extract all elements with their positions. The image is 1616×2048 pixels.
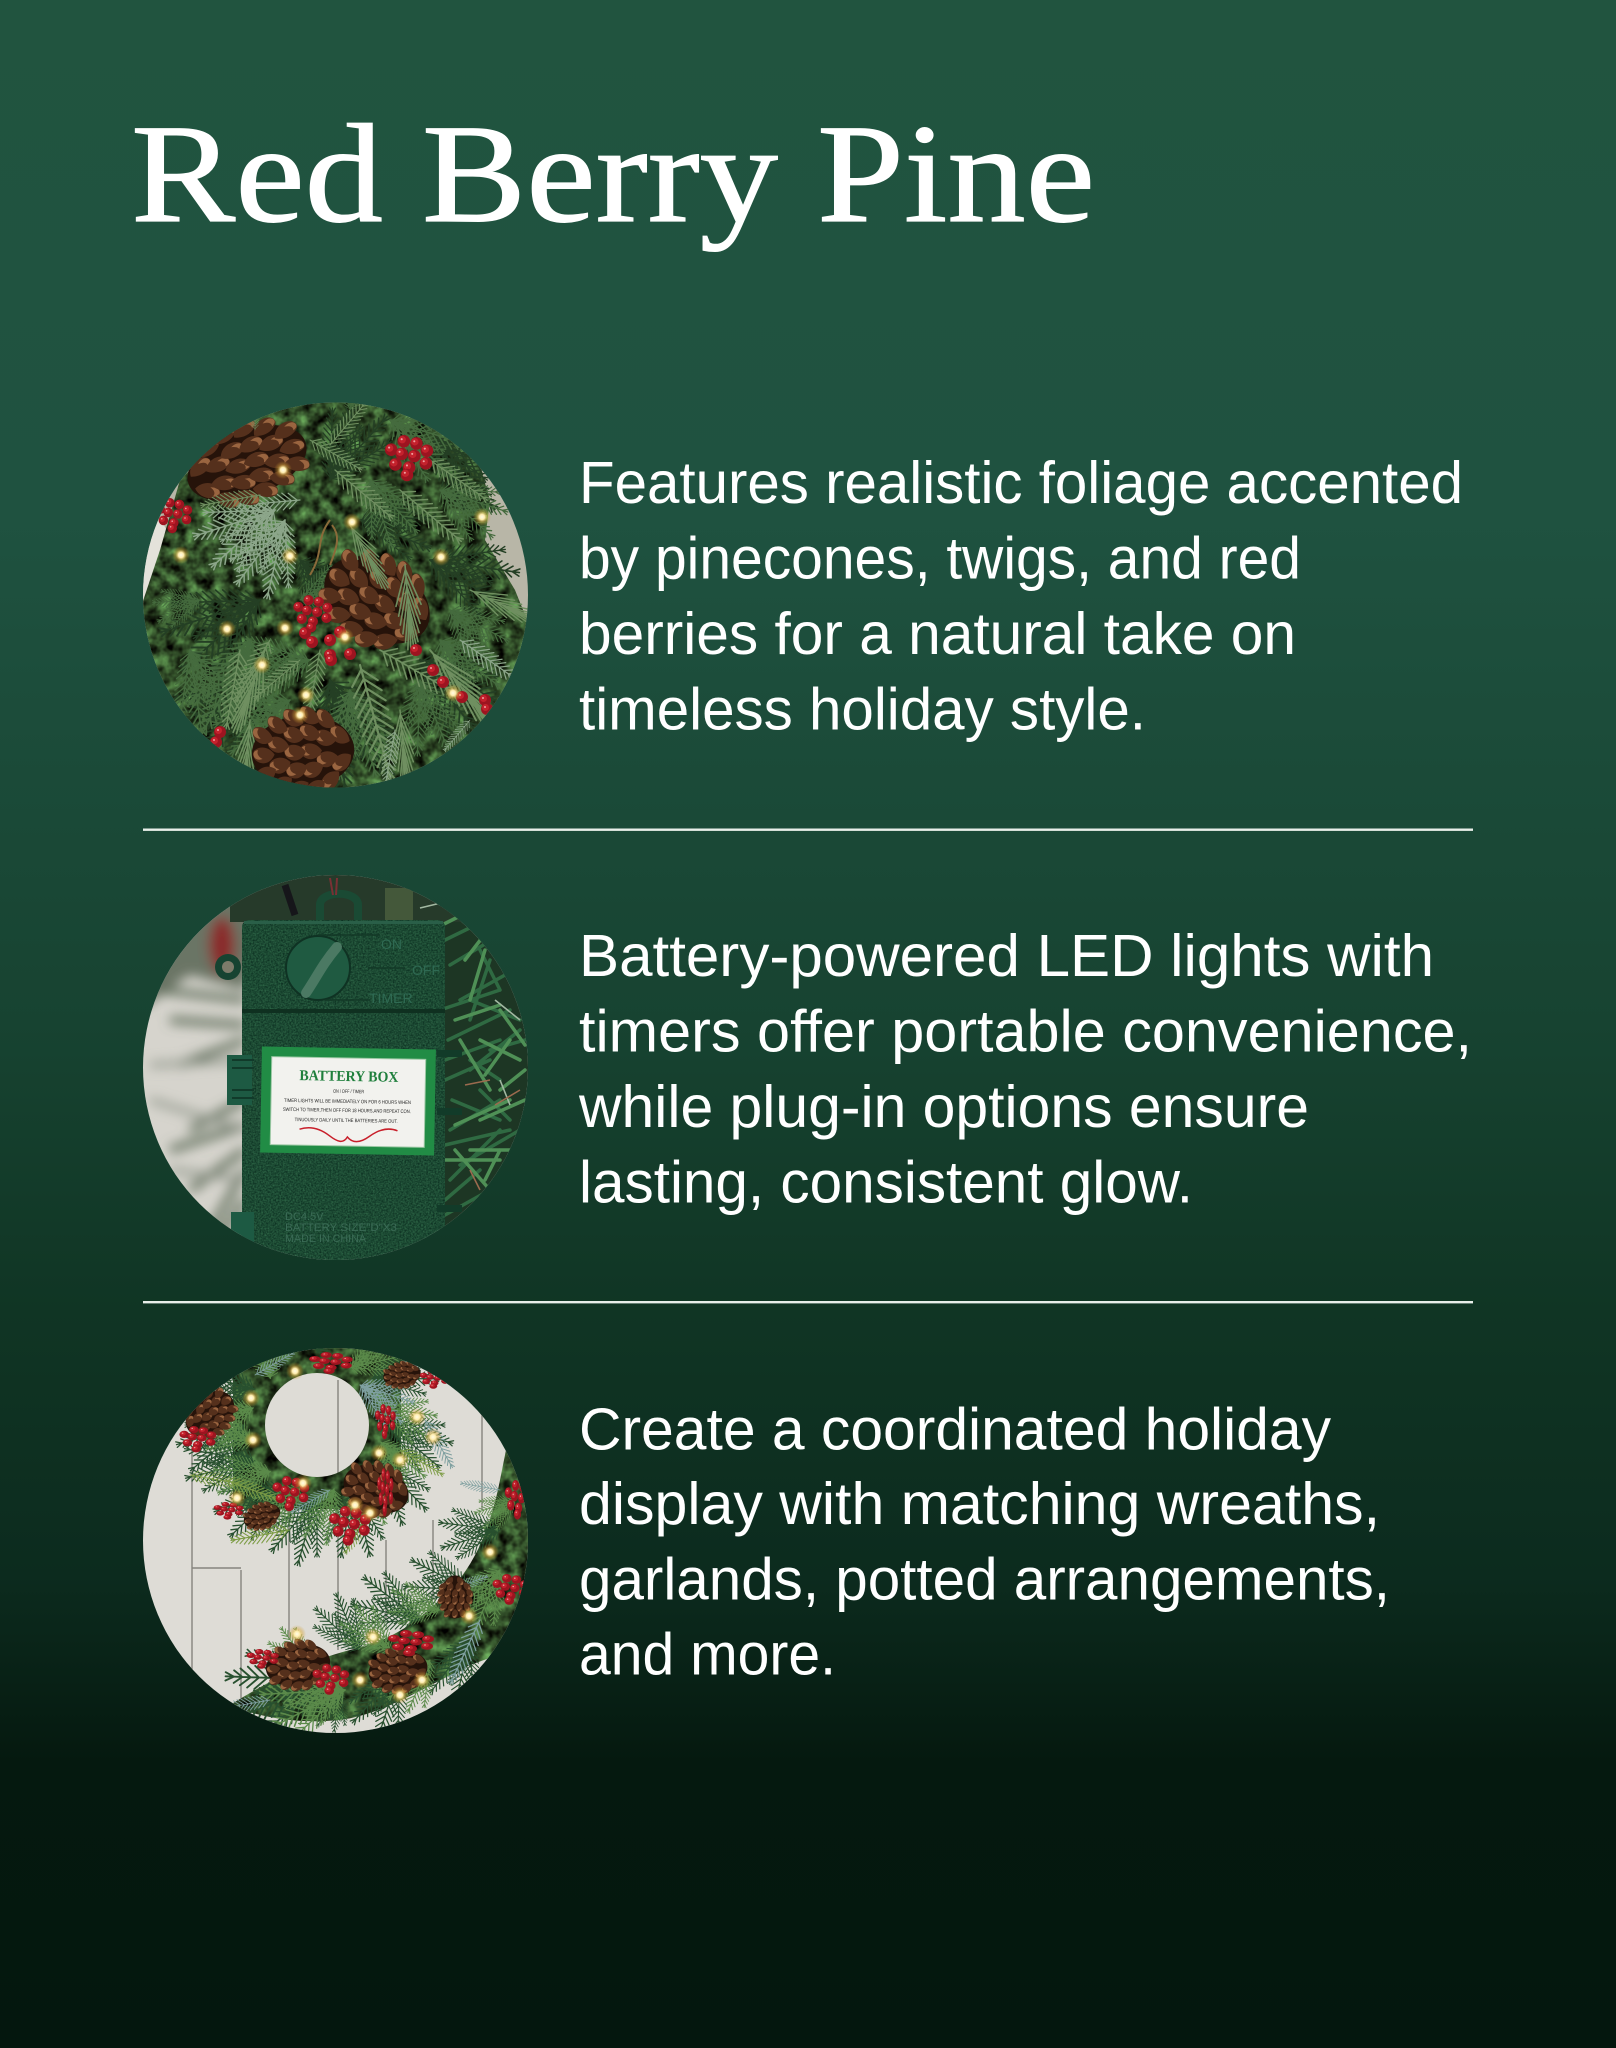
- red berries: [155, 435, 493, 748]
- divider 1: [143, 828, 1473, 831]
- wreath: [175, 1348, 455, 1567]
- LED lights: [172, 461, 491, 724]
- battery box label: SWITCH TO TIMER,THEN OFF FOR 18 HOURS,AND REPEAT CON.: [283, 1107, 411, 1115]
- garland: [224, 1450, 528, 1733]
- photo: battery box: [140, 870, 540, 1280]
- description: foliage: Features realistic foliage accented: [579, 450, 1463, 516]
- battery box body: [215, 920, 462, 1280]
- panel: coordinated display: [143, 1348, 1385, 1733]
- description line 4: and more.: [579, 1622, 836, 1688]
- description line 4: timeless holiday style.: [579, 676, 1146, 742]
- description line 2: timers offer portable convenience,: [579, 998, 1472, 1064]
- wires and hook: [282, 878, 413, 920]
- photo: pine garland with pinecones and berries: [143, 402, 528, 788]
- photo: wreath and garland on white planks: [143, 1348, 528, 1733]
- red berries: [179, 1352, 532, 1695]
- description: battery lights: Battery-powered LED lights with: [579, 923, 1434, 989]
- battery box label: TIMER LIGHTS WILL BE IMMEDIATELY ON FOR 6 HOURS WHEN: [284, 1098, 411, 1106]
- battery box body: ON: [381, 936, 402, 952]
- battery box body: MADE IN CHINA: [285, 1233, 367, 1245]
- battery box label: ON / OFF / TIMER: [333, 1089, 364, 1095]
- description line 2: by pinecones, twigs, and red: [579, 526, 1301, 592]
- description line 2: display with matching wreaths,: [579, 1471, 1380, 1537]
- description: coordinated display: Create a coordinated holiday: [579, 1396, 1331, 1462]
- battery box body: OFF: [412, 962, 440, 978]
- battery box body: DC4.5V: [285, 1211, 324, 1223]
- description line 3: berries for a natural take on: [579, 601, 1296, 667]
- description line 4: lasting, consistent glow.: [579, 1150, 1193, 1216]
- panel: realistic foliage: [143, 402, 1460, 788]
- description line 3: while plug-in options ensure: [578, 1074, 1309, 1140]
- description line 3: garlands, potted arrangements,: [579, 1546, 1390, 1612]
- battery box label: BATTERY BOX: [299, 1068, 399, 1086]
- battery box label: TINUOUSLY DAILY UNTIL THE BATTERIES ARE OUT.: [295, 1117, 398, 1125]
- battery box body: TIMER: [369, 990, 413, 1006]
- battery box label: [260, 1046, 436, 1156]
- battery box body: BATTERY SIZE"D"X3: [285, 1222, 397, 1234]
- panel: battery box lights: [140, 870, 1472, 1280]
- divider 2: [143, 1301, 1473, 1303]
- pinecones: [172, 1357, 475, 1701]
- title: Red Berry Pine: [131, 96, 1095, 252]
- pinecones: [188, 417, 430, 788]
- twigs: [310, 520, 337, 575]
- LED lights: [228, 1362, 499, 1704]
